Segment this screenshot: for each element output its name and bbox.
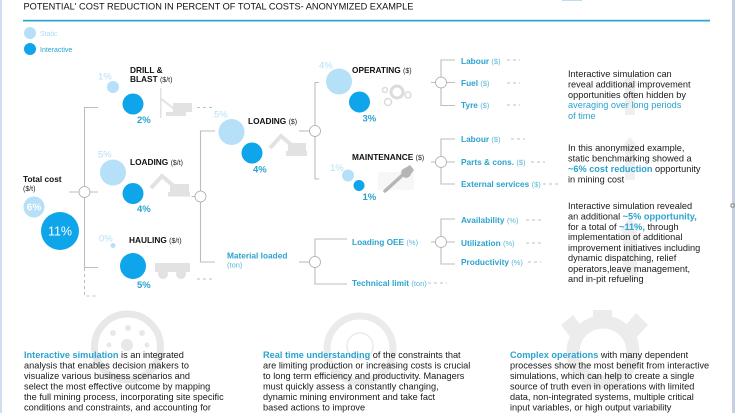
insight: averaging: [568, 69, 691, 121]
maintenance: [330, 152, 424, 203]
icon: drill rig: [160, 88, 192, 118]
insight: additional opportunity: an additional ~5% opportunity,: [568, 212, 697, 222]
text: interactive simulation: [24, 350, 224, 412]
operating: 3%: [362, 114, 377, 124]
insight: additional opportunity: operators,leave management,: [568, 264, 690, 274]
insight: averaging: reveal additional improvement: [568, 80, 691, 90]
insight: benchmarking: [568, 143, 701, 184]
text: interactive simulation: analysis that enables decision makers to: [24, 360, 189, 370]
maintenance cost drivers: Labour ($): [461, 134, 501, 144]
text: real time understanding: Real time understanding of the constraints that: [263, 350, 461, 360]
insight: averaging: of time: [568, 111, 596, 121]
text: real time understanding: based actions to improve: [263, 402, 365, 412]
insight: benchmarking: In this anonymized example,: [568, 143, 684, 153]
drill and blast: BLAST ($/t): [130, 74, 172, 84]
left page edge: [0, 0, 2, 413]
loading oee branch: Availability (%): [461, 215, 519, 225]
total cost: Total cost: [23, 174, 62, 184]
background icon: gear: [561, 310, 648, 382]
text: complex operations: [510, 350, 709, 412]
maintenance cost drivers: External services ($): [461, 179, 541, 189]
operating: OPERATING ($): [352, 65, 412, 75]
insight: averaging: Interactive simulation can: [568, 69, 672, 79]
loading per dollar: [214, 110, 307, 176]
icon: haul truck: [155, 263, 190, 279]
text: complex operations: data, non-integrated systems, multiple critical: [510, 392, 694, 402]
text: complex operations: source of truth even in operations with limited: [510, 382, 694, 392]
text: interactive simulation: Interactive simulation is an integrated: [24, 350, 184, 360]
total cost: [23, 174, 79, 250]
icon: gears: [382, 86, 411, 106]
insight: benchmarking: in mining cost: [568, 174, 625, 184]
loading oee branch: Technical limit (ton): [352, 278, 427, 288]
maintenance cost drivers: Parts & cons. ($): [461, 157, 526, 167]
background arrows behind text: [620, 73, 640, 280]
text: real time understanding: dynamic mining environment and take fact: [263, 392, 436, 402]
operating cost drivers: Tyre ($): [461, 100, 490, 110]
legend: Static: [40, 31, 58, 38]
material loaded: Material loaded: [227, 250, 287, 260]
insight: additional opportunity: [568, 201, 700, 284]
drill and blast: 1%: [98, 72, 112, 82]
maintenance: 1%: [362, 192, 377, 203]
loading per dollar: LOADING ($): [248, 116, 297, 126]
icon: excavator: [151, 176, 190, 196]
tree connector lines: [69, 60, 558, 296]
loading oee branch: Productivity (%): [461, 257, 523, 267]
hauling: 0%: [99, 234, 113, 244]
loading per dollar: 5%: [214, 110, 228, 120]
title: POTENTIAL' COST REDUCTION IN PERCENT OF TOTAL COSTS- ANONYMIZED EXAMPLE: [24, 2, 413, 12]
junction nodes: [79, 77, 446, 268]
text: complex operations: processes show the most benefit from interactive: [510, 360, 709, 370]
insight: averaging: opportunities often hidden by: [568, 90, 686, 100]
right page edge: [732, 0, 735, 413]
operating: 4%: [319, 60, 333, 72]
insight: additional opportunity: and in-pit refueling: [568, 274, 644, 284]
hauling: 5%: [137, 280, 151, 291]
hauling: HAULING ($/t): [129, 235, 182, 245]
insight: additional opportunity: Interactive simulation revealed: [568, 201, 692, 211]
text: real time understanding: must quickly assess a constantly changing,: [263, 382, 439, 392]
drill and blast: 2%: [137, 115, 151, 126]
title rule: [23, 20, 710, 22]
loading per tonne: 5%: [98, 150, 112, 160]
total cost: 6%: [27, 202, 41, 214]
loading per tonne: 4%: [137, 204, 151, 215]
operating cost drivers: Fuel ($): [461, 78, 490, 88]
material loaded: [227, 250, 287, 270]
insight: averaging: averaging over long periods: [568, 100, 682, 110]
insight: benchmarking: static benchmarking showed a: [568, 154, 692, 164]
operating cost drivers: [461, 56, 501, 110]
loading per dollar: 4%: [253, 164, 267, 176]
small mark on right edge: [731, 204, 734, 207]
icon: wrench: [378, 165, 414, 191]
text: interactive simulation: the full mining process, incorporating site specific: [24, 392, 224, 402]
legend: Interactive: [40, 47, 72, 54]
text: complex operations: Complex operations with many dependent: [510, 350, 689, 360]
operating: [319, 60, 412, 124]
background icon: network: [94, 314, 160, 380]
insight: benchmarking: ~6% cost reduction opportunity: [568, 164, 701, 174]
maintenance: MAINTENANCE ($): [352, 152, 424, 162]
text: interactive simulation: visualize various business scenarios and: [24, 371, 190, 381]
drill and blast: DRILL &: [130, 65, 163, 75]
insight: additional opportunity: dynamic dispatching, relief: [568, 253, 677, 263]
icon: excavator: [270, 136, 307, 156]
text: real time understanding: [263, 350, 470, 412]
hauling: [99, 234, 190, 291]
loading per tonne: LOADING ($/t): [130, 157, 183, 167]
loading oee branch: Loading OEE (%): [352, 237, 419, 247]
maintenance: 1%: [330, 163, 344, 174]
text: real time understanding: are limiting production or increasing costs is crucial: [263, 360, 470, 370]
text: real time understanding: to long term efficiency and productivity. Managers: [263, 371, 465, 381]
text: complex operations: input variables, or high output variability: [510, 402, 672, 412]
total cost: 11%: [48, 224, 72, 238]
operating cost drivers: Labour ($): [461, 56, 501, 66]
text: interactive simulation: conditions and constraints, and accounting for: [24, 402, 211, 412]
text: complex operations: simulations, which can help to create a single: [510, 371, 694, 381]
insight: additional opportunity: improvement initiatives including: [568, 243, 700, 253]
top accent: [562, 0, 582, 2]
insight: additional opportunity: for a total of ~11%, through: [568, 222, 679, 232]
loading oee branch: Utilization (%): [461, 238, 515, 248]
total cost: ($/t): [23, 186, 35, 193]
loading per tonne: [98, 150, 190, 215]
text: interactive simulation: select the most effective outcome by mapping: [24, 382, 210, 392]
maintenance cost drivers: [461, 134, 541, 189]
drill and blast: [98, 65, 192, 126]
background icon: cycle: [327, 316, 393, 382]
legend: [24, 27, 72, 55]
loading oee branch: [352, 215, 523, 288]
material loaded: (ton): [227, 260, 243, 270]
insight: additional opportunity: implementation of additional: [568, 232, 682, 242]
